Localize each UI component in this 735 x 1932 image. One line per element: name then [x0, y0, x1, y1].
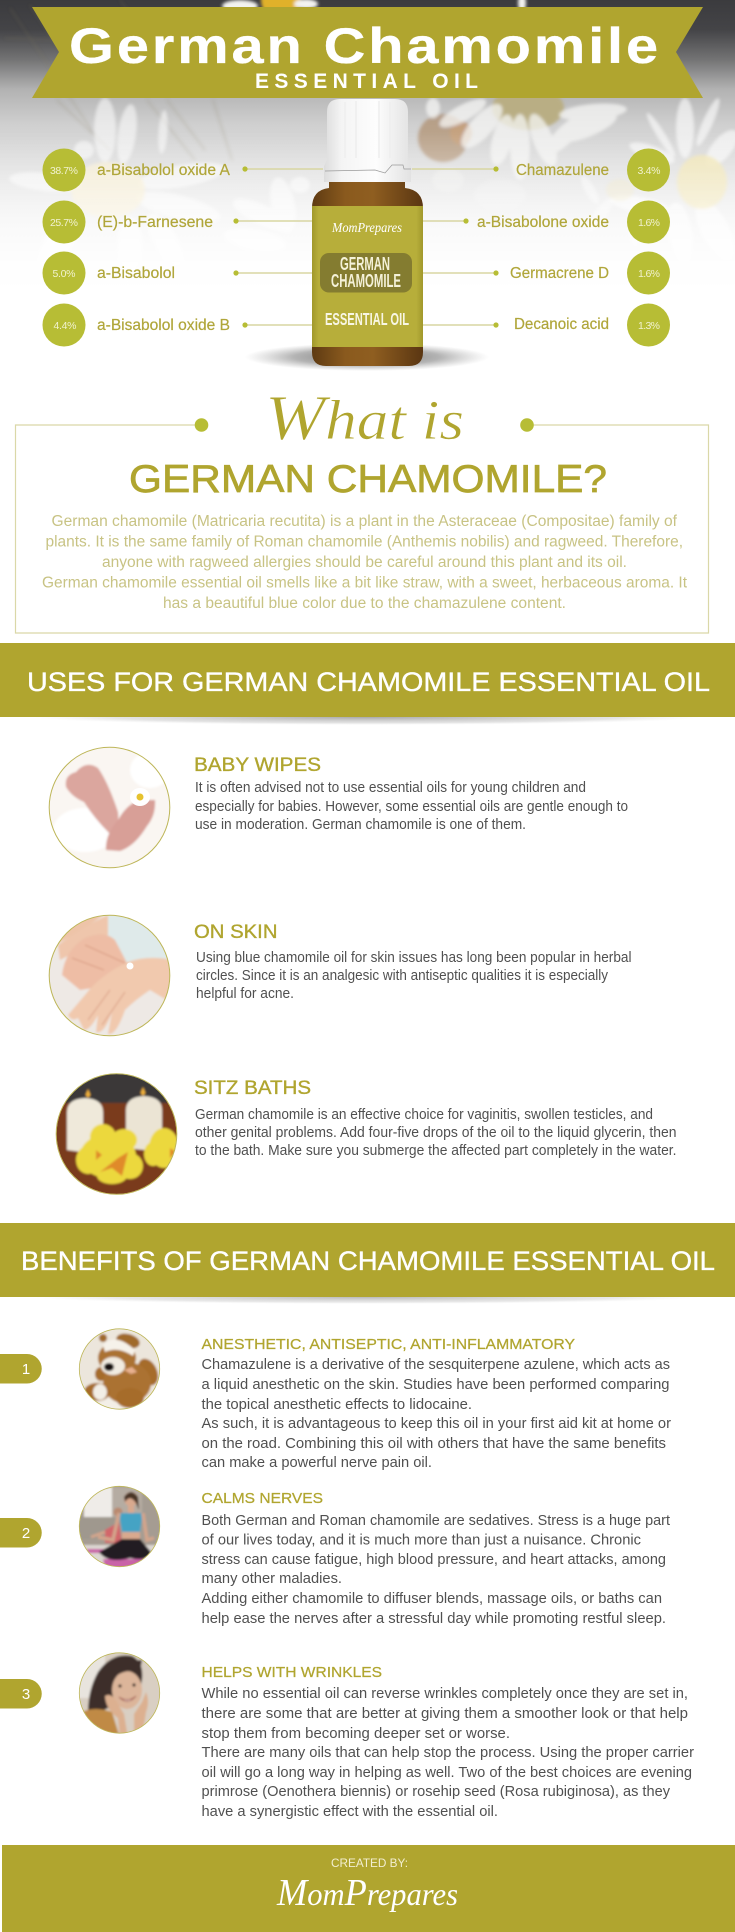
connector lines — [233, 166, 499, 328]
benefit 3 — [0, 1648, 694, 1820]
subtitle: Essential Oil: ESSENTIAL OIL — [255, 70, 478, 93]
photo: teddy bear — [78, 1328, 160, 1410]
composition list: left: 38.7% — [50, 165, 78, 177]
created by: CREATED BY: — [331, 1858, 408, 1870]
number tag 3: 3 — [22, 1686, 30, 1703]
text: primrose (Oenothera biennis) or rosehip seed (Rosa rubiginosa), as they — [202, 1783, 670, 1800]
heading: German Chamomile?: GERMAN CHAMOMILE? — [129, 458, 607, 501]
text: stress can cause fatigue, high blood pressure, and heart attacks, among — [202, 1551, 666, 1568]
text: use in moderation. German chamomile is one of them. — [195, 816, 526, 833]
heading: HELPS WITH WRINKLES — [202, 1664, 382, 1681]
composition list: right: 1.6% — [638, 217, 660, 229]
benefit 1 — [0, 1325, 671, 1471]
photo: smiling woman — [78, 1652, 160, 1734]
composition list: right: 1.3% — [638, 320, 660, 332]
composition list: right — [477, 148, 670, 346]
text: of our lives today, and it is much more than just a nuisance. Chronic — [202, 1532, 641, 1548]
MomPrepares wordmark: MomPrepares — [276, 1872, 458, 1914]
text: a liquid anesthetic on the skin. Studies have been performed comparing — [202, 1376, 670, 1393]
text: helpful for acne. — [196, 985, 294, 1002]
footer — [2, 1845, 735, 1932]
text: Using blue chamomile oil for skin issues has long been popular in herbal — [196, 949, 632, 966]
essential oil bottle: ESSENTIAL OIL — [325, 309, 409, 329]
composition list: right: Decanoic acid — [514, 316, 609, 333]
section header: uses: USES FOR GERMAN CHAMOMILE ESSENTIAL OIL — [27, 667, 710, 697]
number tag 2: 2 — [22, 1525, 30, 1542]
heading: ANESTHETIC, ANTISEPTIC, ANTI-INFLAMMATORY — [202, 1336, 575, 1353]
text: have a synergistic effect with the essential oil. — [202, 1803, 498, 1820]
text: can make a powerful nerve pain oil. — [202, 1454, 432, 1471]
text — [202, 1685, 694, 1820]
panel: what is German chamomile — [16, 382, 708, 633]
composition list: left: 25.7% — [50, 217, 78, 229]
script heading: What is: What is — [265, 382, 464, 453]
description text: German chamomile essential oil smells like a bit like straw, with a sweet, herbaceous aroma. It — [42, 574, 688, 592]
text: circles. Since it is an analgesic with antiseptic qualities it is especially — [196, 967, 608, 984]
use: on skin — [48, 914, 631, 1036]
text: As such, it is advantageous to keep this oil in your first aid kit at home or — [202, 1415, 671, 1432]
use: baby wipes — [45, 743, 628, 873]
photo: yoga — [78, 1486, 160, 1568]
section header: benefits: BENEFITS OF GERMAN CHAMOMILE ESSENTIAL OIL — [21, 1246, 715, 1276]
text: many other maladies. — [202, 1570, 342, 1587]
photo: baby feet — [48, 746, 170, 868]
title: German Chamomile: German Chamomile — [69, 18, 661, 74]
composition list: right: a-Bisabolone oxide — [477, 214, 609, 231]
hero background with daisies — [0, 0, 735, 330]
text: other genital problems. Add four-five drops of the oil to the liquid glycerin, then — [195, 1124, 676, 1141]
description text: plants. It is the same family of Roman chamomile (Anthemis nobilis) and ragweed. Therefore, — [46, 534, 683, 550]
use: sitz baths — [52, 1070, 676, 1200]
composition list: left: (E)-b-Farnesene — [97, 214, 213, 231]
heading: BABY WIPES — [194, 754, 321, 776]
text: Chamazulene is a derivative of the sesquiterpene azulene, which acts as — [202, 1356, 670, 1373]
composition list: left: 5.0% — [52, 268, 76, 280]
composition list: right: Chamazulene — [516, 162, 609, 179]
text: to the bath. Make sure you submerge the affected part completely in the water. — [195, 1142, 676, 1159]
number tag 2 — [0, 1518, 42, 1548]
text — [196, 949, 632, 1002]
essential oil bottle — [245, 99, 489, 371]
text — [195, 779, 628, 833]
section header: uses — [0, 643, 735, 725]
number tag 1: 1 — [22, 1361, 30, 1378]
text: Adding either chamomile to diffuser blends, massage oils, or baths can — [202, 1590, 662, 1607]
text — [202, 1356, 671, 1471]
number tag 3 — [0, 1679, 42, 1708]
text: There are many oils that can help stop the process. Using the proper carrier — [202, 1744, 694, 1761]
photo: hands — [48, 914, 170, 1036]
title ribbon — [32, 7, 703, 98]
composition list: left: a-Bisabolol oxide B — [97, 317, 230, 334]
composition list: right: 3.4% — [638, 165, 660, 177]
text: While no essential oil can reverse wrinkles completely once they are set in, — [202, 1685, 688, 1702]
text: there are some that are better at giving them a smoother look or that help — [202, 1705, 688, 1722]
text: Both German and Roman chamomile are sedatives. Stress is a huge part — [202, 1512, 671, 1529]
heading: SITZ BATHS — [194, 1077, 311, 1099]
text: especially for babies. However, some essential oils are gentle enough to — [195, 798, 628, 815]
text: oil will go a long way in helping as well. Two of the best choices are evening — [202, 1764, 692, 1781]
composition list: right: Germacrene D — [510, 265, 609, 282]
description text: anyone with ragweed allergies should be careful around this plant and its oil. — [102, 554, 627, 571]
photo: candles — [56, 1073, 178, 1195]
heading: ON SKIN — [194, 921, 278, 943]
text: stop them from becoming deeper set or worse. — [202, 1725, 510, 1742]
text: the topical anesthetic effects to lidocaine. — [202, 1396, 472, 1413]
description text — [42, 513, 688, 612]
essential oil bottle: CHAMOMILE — [331, 271, 401, 291]
number tag 1 — [0, 1354, 42, 1384]
text: It is often advised not to use essential oils for young children and — [195, 779, 586, 796]
bottle brand: MomPrepares — [331, 221, 402, 236]
bottle label text: GERMAN — [340, 254, 390, 274]
text: German chamomile is an effective choice for vaginitis, swollen testicles, and — [195, 1106, 653, 1123]
text — [202, 1512, 671, 1627]
composition list: left — [42, 148, 231, 346]
heading: CALMS NERVES — [202, 1490, 323, 1507]
text: on the road. Combining this oil with others that have the same benefits — [202, 1435, 666, 1452]
composition list: left: a-Bisabolol — [97, 265, 175, 282]
section header: benefits — [0, 1223, 735, 1304]
description text: has a beautiful blue color due to the chamazulene content. — [163, 595, 566, 612]
text: help ease the nerves after a stressful day while promoting restful sleep. — [202, 1610, 666, 1627]
description text: German chamomile (Matricaria recutita) is a plant in the Asteraceae (Compositae) family of — [52, 513, 678, 530]
composition list: left: 4.4% — [54, 320, 76, 332]
text — [195, 1106, 676, 1159]
benefit 2 — [0, 1482, 671, 1627]
composition list: left: a-Bisabolol oxide A — [97, 162, 231, 179]
composition list: right: 1.6% — [638, 268, 660, 280]
